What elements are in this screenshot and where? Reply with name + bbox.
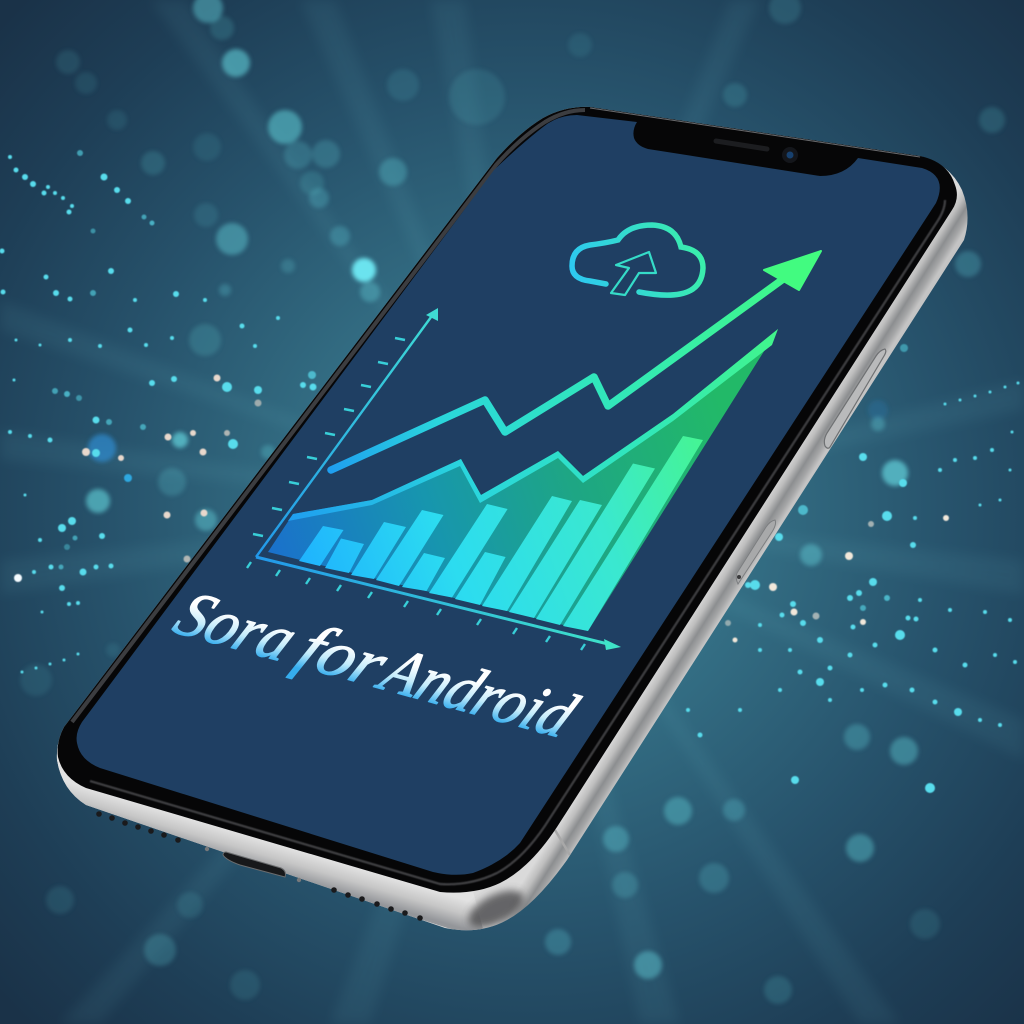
cloud outline: [572, 225, 703, 295]
title: Sora for Android: Android: [366, 634, 589, 751]
bottom speaker grille left: [96, 811, 181, 843]
bezel top hairline: [590, 108, 920, 157]
background: glowing particle dots, right cluster: [686, 344, 1020, 793]
screw left: [205, 847, 209, 851]
cloud upload icon: [572, 225, 703, 295]
upload arrow: [611, 252, 656, 295]
side hole: [737, 575, 741, 579]
rising trend arrow: [331, 251, 821, 470]
earpiece speaker: [716, 141, 767, 149]
x axis with arrow: [256, 557, 621, 650]
charging port: [223, 852, 286, 877]
phone body: [40, 107, 968, 940]
y axis with arrow: [256, 308, 438, 557]
silver frame: [57, 107, 968, 930]
screw right: [297, 878, 301, 882]
y axis ticks: [253, 338, 405, 536]
antenna seam: [555, 830, 570, 855]
chart: [247, 251, 821, 650]
bars: [299, 436, 703, 631]
frame shading: [40, 740, 570, 940]
area top line: [288, 329, 778, 521]
bottom speaker grille right: [331, 887, 423, 921]
title: Sora for Android: [163, 579, 589, 751]
volume button: [824, 349, 886, 448]
screen: [77, 115, 940, 875]
bezel left sheen: [72, 110, 585, 722]
bottom edge shading: [56, 742, 483, 930]
area fill: [268, 329, 778, 631]
corner shadow: [464, 885, 528, 930]
title: Sora for Android: for: [285, 612, 402, 700]
background: warm sparkle dots, left cluster: [14, 374, 262, 582]
x axis ticks: [247, 562, 585, 650]
title: Sora for Android: Sora: [163, 579, 310, 675]
background: glowing particle dots, left cluster: [0, 150, 316, 674]
front camera: [782, 147, 798, 163]
power button outline: [736, 520, 776, 584]
black bezel: [58, 107, 957, 893]
bezel side sheen: [90, 200, 945, 884]
background: warm sparkle dots, right cluster: [725, 515, 949, 642]
